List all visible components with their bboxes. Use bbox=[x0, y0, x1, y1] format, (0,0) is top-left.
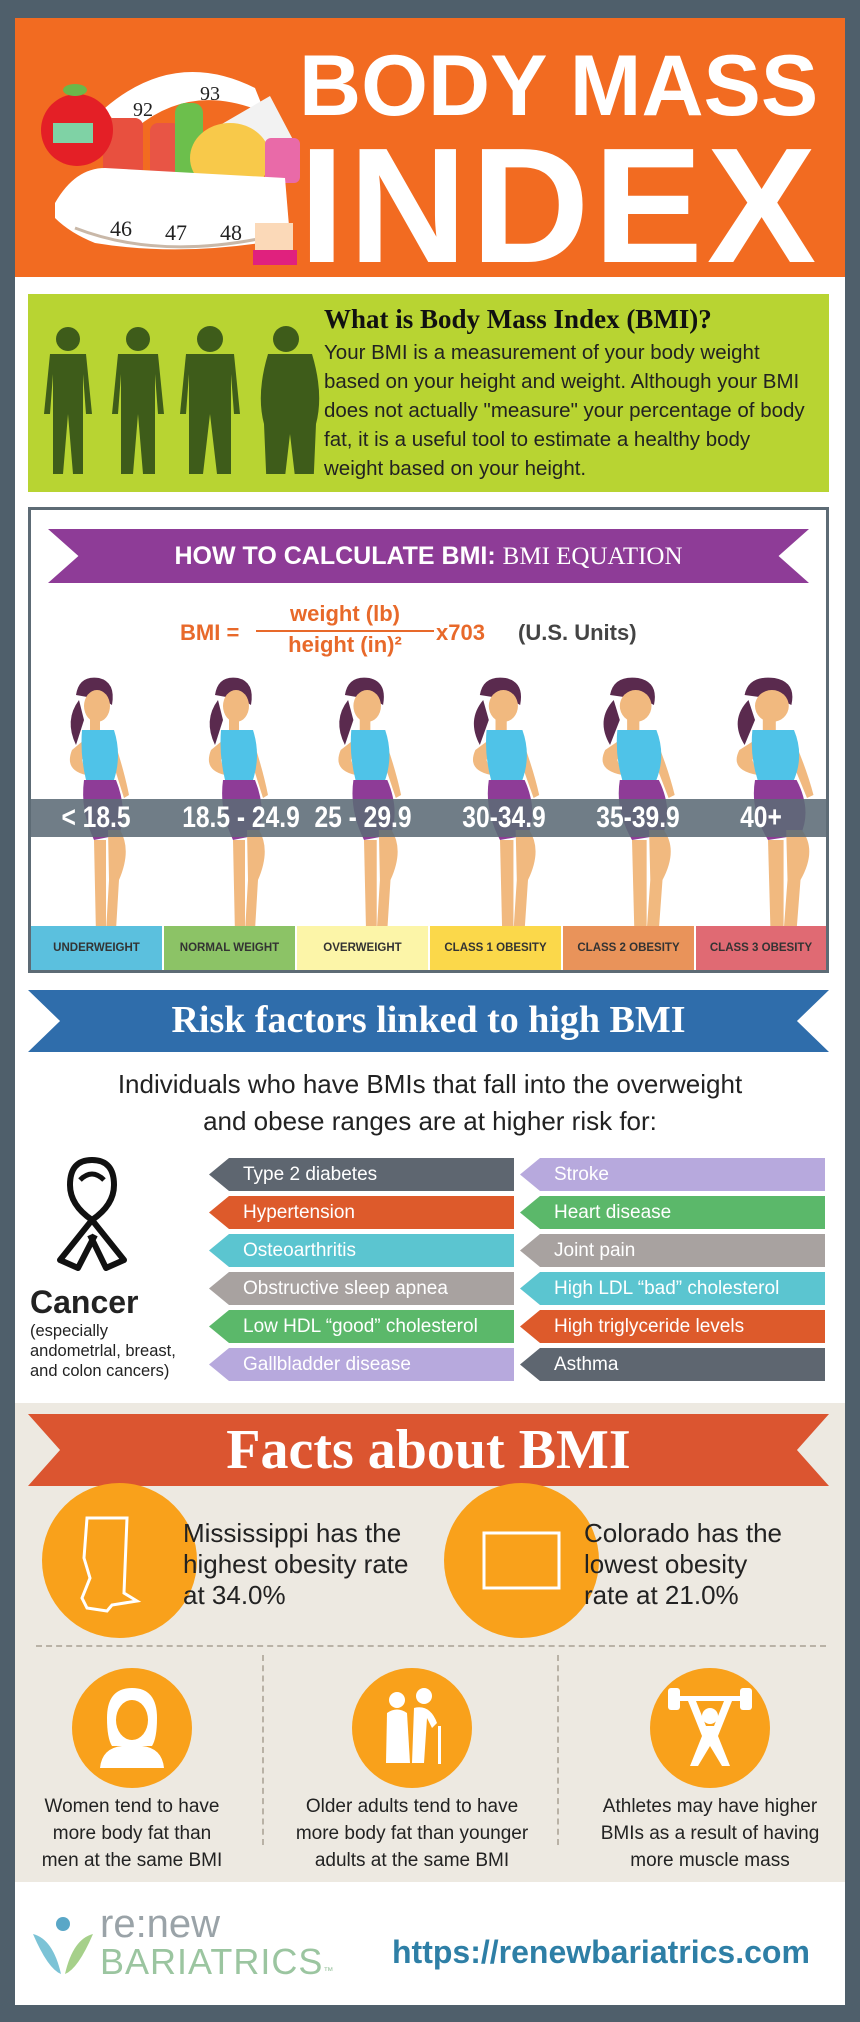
text: cancer: and colon cancers) bbox=[30, 1362, 169, 1380]
list: risk factors right bbox=[520, 1158, 825, 1381]
illustration: diet tape measure: 46 bbox=[110, 216, 132, 241]
fact: women bbox=[42, 1796, 222, 1871]
text block: fat, it is a useful tool to estimate a healthy body bbox=[324, 428, 750, 451]
list: risk factors right: Heart disease bbox=[554, 1202, 671, 1223]
banner: facts about BMI bbox=[28, 1414, 829, 1486]
formula: height (in)² bbox=[288, 632, 402, 657]
fact: older adults: more body fat than younger bbox=[296, 1823, 528, 1844]
text block: weight based on your height. bbox=[324, 457, 586, 480]
illustration: diet tape measure: 93 bbox=[200, 83, 220, 105]
icon: woman bbox=[72, 1668, 192, 1788]
fact: older adults bbox=[296, 1796, 528, 1871]
BMI range numbers: 25 - 29.9 bbox=[314, 801, 412, 834]
text block: does not actually "measure" your percentage of body bbox=[324, 399, 805, 422]
formula: BMI = bbox=[180, 620, 239, 645]
illustration: diet tape measure bbox=[41, 72, 300, 265]
title bbox=[299, 38, 820, 277]
category labels: NORMAL WEIGHT bbox=[180, 942, 279, 954]
banner: how to calculate bbox=[48, 529, 809, 583]
chart: women figures bbox=[70, 678, 814, 926]
fact: colorado: Colorado has the bbox=[584, 1518, 782, 1548]
icon: athlete bbox=[650, 1668, 770, 1788]
list: risk factors left bbox=[209, 1158, 514, 1381]
banner: how to calculate: HOW TO CALCULATE BMI: BMI EQUATION bbox=[174, 542, 683, 570]
category labels bbox=[31, 926, 826, 970]
list: risk factors right: Stroke bbox=[554, 1164, 609, 1185]
title: BODY MASS bbox=[299, 38, 818, 134]
icon: cancer ribbon bbox=[57, 1157, 127, 1271]
list: risk factors right: High triglyceride levels bbox=[554, 1316, 744, 1337]
formula: weight (lb) bbox=[290, 601, 400, 626]
illustration: diet tape measure: 92 bbox=[133, 99, 153, 121]
fact: mississippi: at 34.0% bbox=[183, 1580, 286, 1610]
illustration: diet tape measure: 48 bbox=[220, 220, 242, 245]
fact: women: more body fat than bbox=[53, 1823, 211, 1844]
category labels: CLASS 2 OBESITY bbox=[577, 942, 680, 954]
fact: athletes: more muscle mass bbox=[630, 1850, 790, 1871]
footer logo bbox=[33, 1902, 334, 1982]
icon: colorado bbox=[444, 1483, 599, 1638]
banner: risk factors bbox=[28, 990, 829, 1052]
list: risk factors right: Asthma bbox=[554, 1354, 618, 1375]
list: risk factors left: Gallbladder disease bbox=[243, 1354, 411, 1375]
list: risk factors left: Low HDL “good” cholesterol bbox=[243, 1316, 478, 1337]
text: cancer: Cancer bbox=[30, 1284, 138, 1320]
fact: mississippi bbox=[183, 1518, 408, 1610]
fact: older adults: Older adults tend to have bbox=[306, 1796, 518, 1817]
icon: body silhouettes bbox=[44, 326, 320, 474]
banner: facts about BMI: Facts about BMI bbox=[226, 1419, 631, 1481]
illustration: diet tape measure: 47 bbox=[165, 220, 187, 245]
formula bbox=[180, 601, 637, 657]
panel: facts bbox=[15, 1403, 845, 1882]
BMI range numbers: 40+ bbox=[740, 801, 782, 834]
formula: (U.S. Units) bbox=[518, 620, 637, 645]
formula: x703 bbox=[436, 620, 485, 645]
category labels: CLASS 3 OBESITY bbox=[710, 942, 812, 954]
fact: athletes bbox=[601, 1796, 819, 1871]
footer logo: BARIATRICS™ bbox=[100, 1941, 334, 1982]
banner: risk factors: Risk factors linked to high BMI bbox=[171, 999, 686, 1041]
text: cancer: (especially bbox=[30, 1322, 108, 1340]
icon: older adults bbox=[352, 1668, 472, 1788]
intro text bbox=[118, 1069, 742, 1136]
text block: Your BMI is a measurement of your body weight bbox=[324, 341, 760, 364]
BMI range numbers: 35-39.9 bbox=[596, 801, 680, 834]
icon: mississippi bbox=[42, 1483, 197, 1638]
fact: colorado: rate at 21.0% bbox=[584, 1580, 739, 1610]
list: risk factors left: Obstructive sleep apnea bbox=[243, 1278, 448, 1299]
fact: colorado bbox=[584, 1518, 782, 1610]
fact: mississippi: highest obesity rate bbox=[183, 1549, 408, 1579]
heading: What is Body Mass Index (BMI)? bbox=[324, 304, 712, 334]
intro text: Individuals who have BMIs that fall into the overweight bbox=[118, 1069, 742, 1099]
list: risk factors right: Joint pain bbox=[554, 1240, 635, 1261]
intro text: and obese ranges are at higher risk for: bbox=[203, 1106, 657, 1136]
text: cancer bbox=[30, 1284, 176, 1380]
list: risk factors right: High LDL “bad” cholesterol bbox=[554, 1278, 779, 1299]
category labels: CLASS 1 OBESITY bbox=[444, 942, 547, 954]
category labels: OVERWEIGHT bbox=[323, 942, 402, 954]
fact: women: Women tend to have bbox=[44, 1796, 219, 1817]
list: risk factors left: Osteoarthritis bbox=[243, 1240, 356, 1261]
panel: calculate BMI bbox=[28, 507, 829, 973]
footer url: https://renewbariatrics.com bbox=[392, 1934, 810, 1970]
text: cancer: andometrlal, breast, bbox=[30, 1342, 176, 1360]
list: risk factors left: Hypertension bbox=[243, 1202, 355, 1223]
fact: colorado: lowest obesity bbox=[584, 1549, 747, 1579]
fact: older adults: adults at the same BMI bbox=[315, 1850, 509, 1871]
panel: what is BMI bbox=[28, 294, 829, 492]
BMI range numbers: 18.5 - 24.9 bbox=[182, 801, 300, 834]
BMI range numbers bbox=[61, 801, 782, 834]
fact: athletes: Athletes may have higher bbox=[603, 1796, 817, 1817]
fact: women: men at the same BMI bbox=[42, 1850, 222, 1871]
list: risk factors left: Type 2 diabetes bbox=[243, 1164, 377, 1185]
band: BMI ranges bbox=[31, 799, 826, 837]
text block: based on your height and weight. Although your BMI bbox=[324, 370, 799, 393]
fact: athletes: BMIs as a result of having bbox=[601, 1823, 819, 1844]
BMI range numbers: 30-34.9 bbox=[462, 801, 546, 834]
BMI range numbers: < 18.5 bbox=[61, 801, 131, 834]
category labels: UNDERWEIGHT bbox=[53, 942, 140, 954]
header panel bbox=[15, 18, 845, 277]
footer logo: re:new bbox=[100, 1902, 220, 1946]
fact: mississippi: Mississippi has the bbox=[183, 1518, 401, 1548]
text block bbox=[324, 341, 805, 480]
